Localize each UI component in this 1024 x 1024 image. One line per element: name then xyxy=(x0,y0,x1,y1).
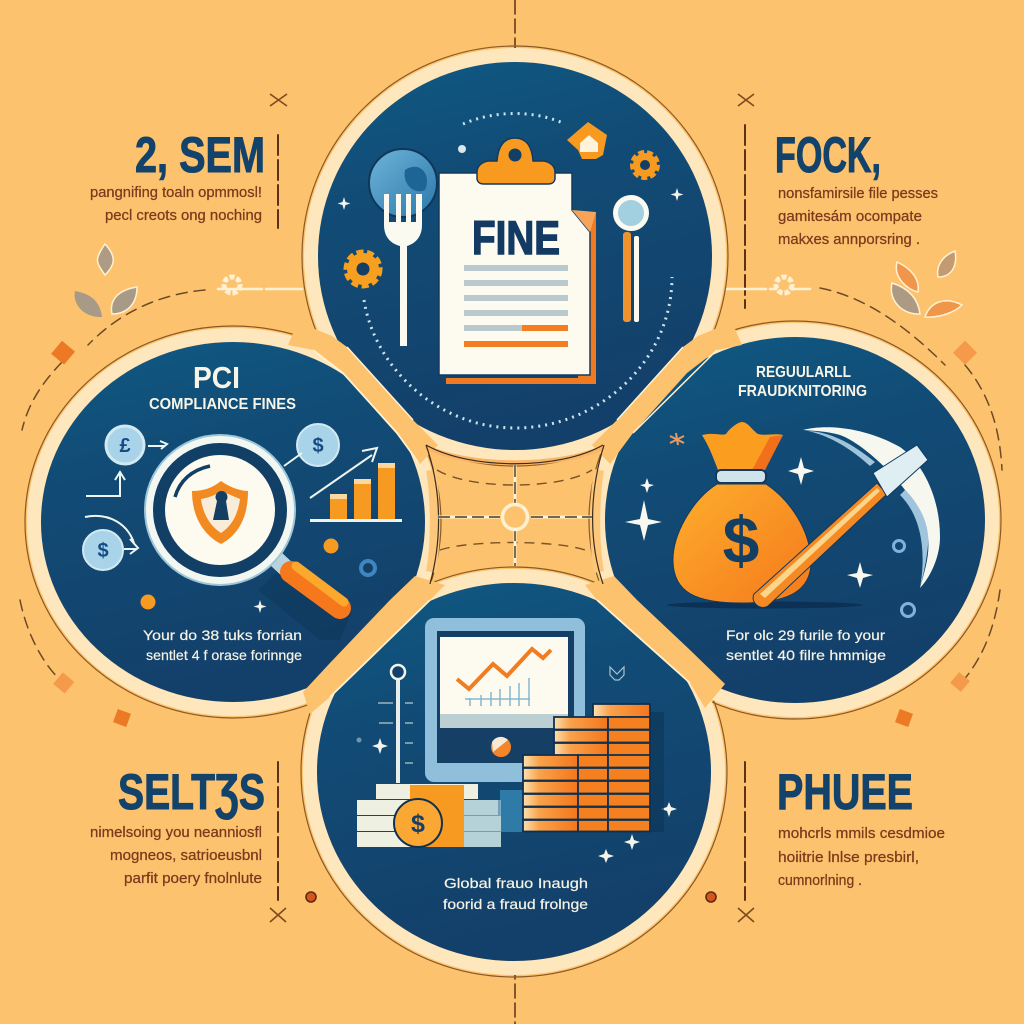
text block: bottom left xyxy=(90,764,265,887)
text block: top right: nonsfamirsile file pesses xyxy=(778,186,938,202)
icon: magnifier and pen xyxy=(616,198,646,322)
icon: left leaves xyxy=(75,244,137,317)
icon: orange diamonds xyxy=(51,341,977,727)
caption: sentlet 4 f orase forinnge xyxy=(146,647,302,663)
icon: orange badge xyxy=(567,122,607,159)
text block: top left: pangnifing toaln opmmosl! xyxy=(90,185,262,201)
text block: top left: pecl creots ong noching xyxy=(105,208,262,224)
bar chart xyxy=(310,448,402,522)
overlap bands between circles xyxy=(288,322,742,714)
icon: sparkles xyxy=(625,433,873,588)
caption xyxy=(143,627,302,663)
small dot xyxy=(458,145,466,153)
icon: right leaves xyxy=(891,251,962,317)
caption: Global frauo Inaugh xyxy=(444,875,588,891)
icon: gear left xyxy=(346,252,380,286)
text block: top right: makxes annporsring . xyxy=(778,232,920,248)
icon: thermometer gauge xyxy=(378,665,413,783)
text block: bottom right: PHUEE xyxy=(777,764,913,820)
icon: cash stacks and coin: $ xyxy=(411,810,425,838)
icon: coin top left xyxy=(106,426,144,464)
panel: bottom circle xyxy=(317,583,711,961)
flow arrows xyxy=(85,441,302,554)
panel: right circle xyxy=(605,337,985,703)
icon: sparkle xyxy=(338,188,684,210)
text block: bottom right: mohcrls mmils cesdmioe xyxy=(778,826,945,842)
centre junction xyxy=(426,445,604,584)
text block: bottom left: SELTƷS xyxy=(118,764,265,820)
icon: fork xyxy=(384,194,422,346)
icon: pickaxe xyxy=(753,427,940,607)
icon: rings xyxy=(894,540,914,616)
dashed ring xyxy=(364,114,672,428)
document title: FINE xyxy=(472,211,560,264)
ground shadow xyxy=(667,602,863,608)
icon: coin top right xyxy=(297,424,339,466)
icon: coin bottom left: $ xyxy=(97,540,109,562)
heading: PCI: PCI xyxy=(193,360,240,395)
icon: monitor with chart xyxy=(425,618,585,782)
icon: gear right xyxy=(632,152,658,178)
icon: coin bottom left xyxy=(83,530,123,570)
caption xyxy=(726,627,886,663)
subheading: COMPLIANCE FINES xyxy=(149,396,296,413)
clipboard document xyxy=(439,138,596,384)
caption: Your do 38 tuks forrian xyxy=(143,627,302,643)
panel: left circle xyxy=(41,342,425,702)
text block: top left xyxy=(90,127,265,224)
text block: bottom left: parfit poery fnolnlute xyxy=(124,871,262,887)
caption: sentlet 40 filre hmmige xyxy=(726,647,886,663)
icon: globe xyxy=(369,149,437,217)
text block: bottom right xyxy=(777,764,945,889)
icon: shield xyxy=(192,481,248,544)
text block: top right: FOCK, xyxy=(775,127,881,183)
document lines xyxy=(464,265,568,347)
panel: top circle xyxy=(318,62,712,450)
icon: coin top left: £ xyxy=(119,435,131,457)
icon: butterfly outline xyxy=(610,667,624,680)
text block: bottom right: cumnorlning . xyxy=(778,873,862,889)
icon: small corner marks xyxy=(270,94,754,922)
icon: orange stacks of coins xyxy=(500,704,664,832)
icon: money bag: $ xyxy=(723,503,759,577)
text block: top left: 2, SEM xyxy=(135,127,265,183)
icon: coin top right: $ xyxy=(312,435,324,457)
icon: gears on connectors xyxy=(224,277,792,293)
subheading: FRAUDKNITORING xyxy=(738,383,867,400)
icon: magnifier with shield xyxy=(145,435,352,640)
text block: top right xyxy=(775,127,938,248)
icon: sparkles xyxy=(356,738,677,863)
icon: money bag xyxy=(673,422,811,603)
caption xyxy=(443,875,588,912)
caption: foorid a fraud frolnge xyxy=(443,896,588,912)
text block: bottom left: mogneos, satrioeusbnl xyxy=(110,848,262,864)
icon: cash stacks and coin xyxy=(357,784,501,847)
decorative dots xyxy=(140,538,375,613)
text block: bottom right: hoiitrie lnlse presbirl, xyxy=(778,850,919,866)
heading: REGUULARLL xyxy=(756,364,851,381)
clip xyxy=(477,138,555,184)
text block: bottom left: nimelsoing you neanniosfl xyxy=(90,825,262,841)
caption: For olc 29 furile fo your xyxy=(726,627,885,643)
text block: top right: gamitesám ocompate xyxy=(778,209,922,225)
